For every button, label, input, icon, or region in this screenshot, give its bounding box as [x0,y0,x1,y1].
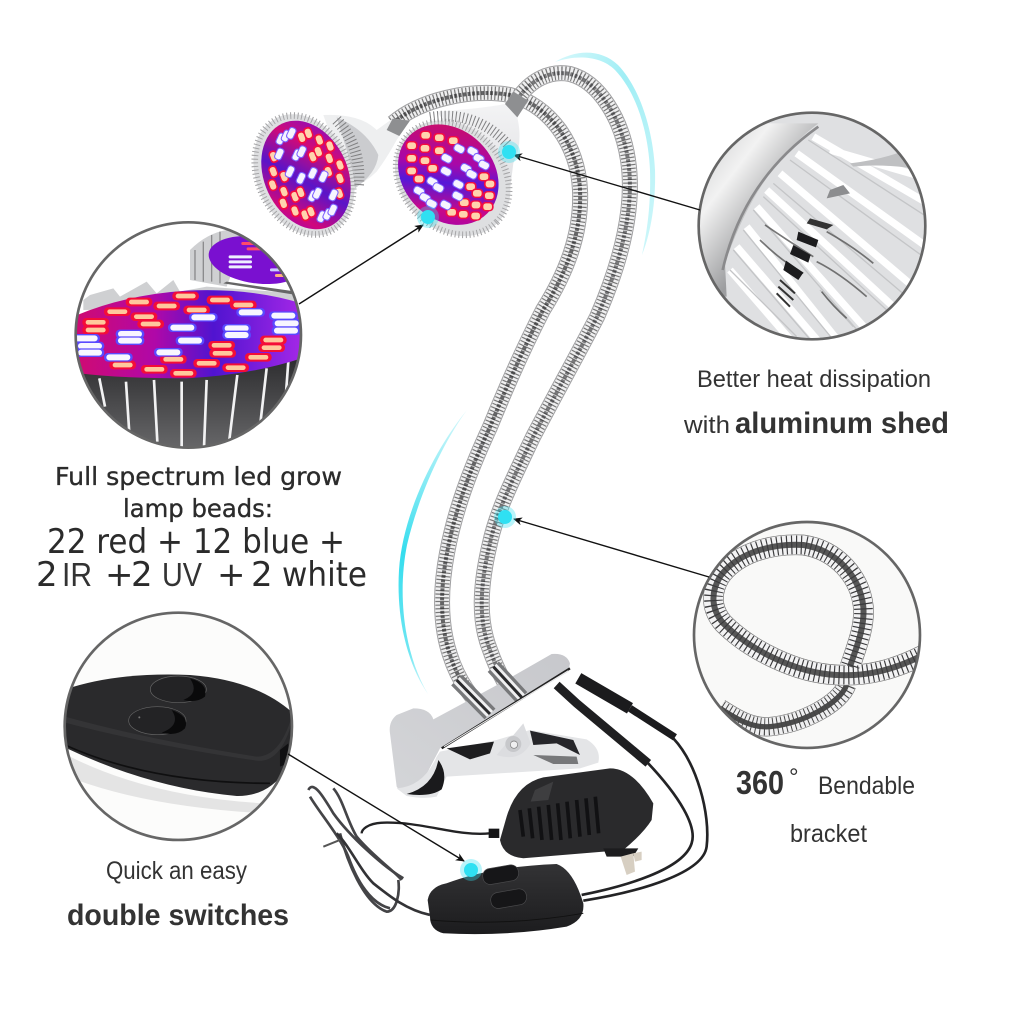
text: switch description: double switches [67,899,289,932]
text: LED description: 2 [131,555,153,595]
text: LED description: white [282,555,367,595]
text: heat dissipation description: aluminum shed [735,407,949,440]
power adapter and wiring [308,678,707,915]
text: LED description [36,462,367,595]
circle: switch close-up [63,610,297,843]
marker dot: gooseneck [494,506,516,528]
circle: aluminum heat sink close-up [687,110,933,343]
text: bendable bracket description: bracket [790,820,867,848]
text: heat dissipation description [683,366,949,440]
text: bendable bracket description [736,764,915,848]
text: bendable bracket description: 360 [736,764,784,801]
lamp head: rear [234,98,410,252]
circle: LED close-up [71,220,308,453]
marker dot: LED face [417,206,439,228]
arrow: LED circle to lamp [299,225,423,304]
clamp [390,654,599,798]
inline double switch [428,864,583,934]
text: LED description: 2 [251,555,273,595]
motion arc: top right [555,53,655,255]
text: LED description: + [217,555,246,595]
text: LED description: lamp beads: [123,494,273,523]
text: switch description: Quick an easy [106,857,247,885]
marker dot: heat sink [498,141,520,163]
text: switch description [67,857,289,932]
text: heat dissipation description: Better heat dissipation [697,366,931,393]
motion arc: lower left [399,410,467,694]
arrow: switch circle to switch [288,754,464,861]
text: LED description: + [105,555,134,595]
text: LED description: 2 [36,555,58,595]
text: LED description: UV [162,556,202,593]
marker dot: switch [460,859,482,881]
text: bendable bracket description: ° [789,764,799,791]
lamp head: front [371,92,534,260]
gooseneck: rear arm [393,93,580,712]
circle: bendable hose close-up [693,520,923,750]
text: LED description: Full spectrum led grow [55,462,342,491]
text: bendable bracket description: Bendable [818,772,915,800]
arrow: heat sink circle to lamp [514,155,700,210]
text: heat dissipation description: with [683,412,730,439]
text: LED description: IR [62,556,92,593]
arrow: hose circle to gooseneck [514,519,709,577]
gooseneck: front arm [482,73,630,702]
text: LED description: 22 red + 12 blue + [47,522,345,562]
